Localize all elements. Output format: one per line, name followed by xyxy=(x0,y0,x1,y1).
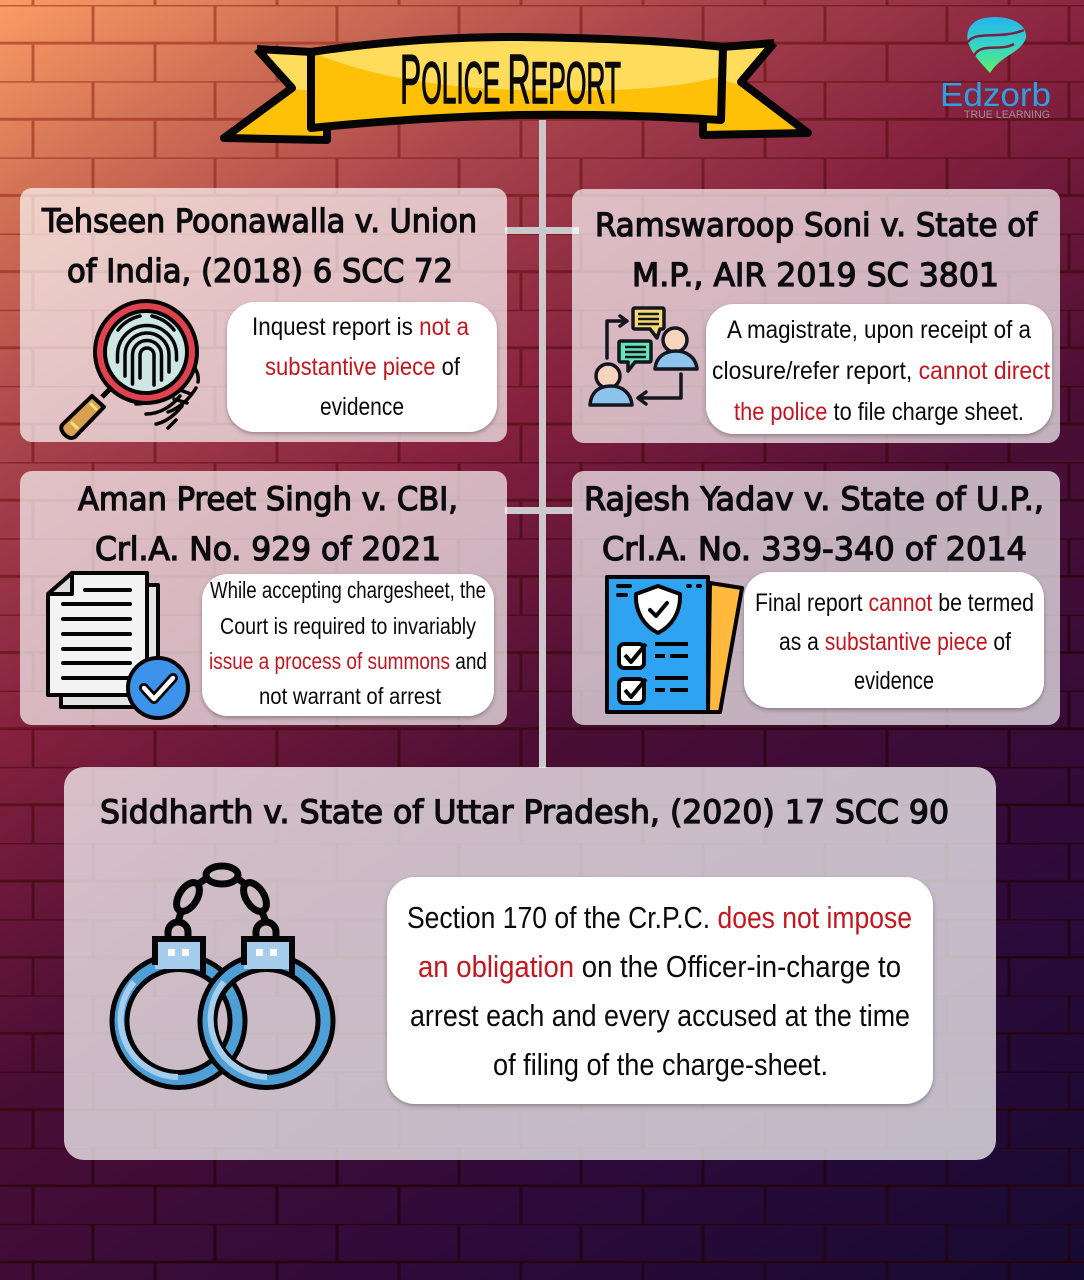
banner heading: POLICE REPORT xyxy=(400,40,621,118)
icon: two people exchanging messages xyxy=(590,308,697,405)
callout: evidence xyxy=(320,393,404,421)
callout: Court is required to invariably xyxy=(220,613,476,639)
callout: substantive piece of xyxy=(265,353,460,381)
callout: arrest each and every accused at the time xyxy=(410,998,910,1033)
heading: Aman Preet Singh v. CBI, xyxy=(78,480,458,518)
callout: evidence xyxy=(854,667,934,695)
heading: Ramswaroop Soni v. State of xyxy=(595,206,1038,244)
callout xyxy=(387,877,933,1104)
callout: as a substantive piece of xyxy=(779,628,1011,656)
callout: While accepting chargesheet, the xyxy=(210,577,486,603)
title banner xyxy=(224,37,808,140)
callout: issue a process of summons and xyxy=(209,648,487,674)
connector lines xyxy=(505,120,579,768)
icon: checklist with shield xyxy=(607,577,742,712)
callout: the police to file charge sheet. xyxy=(734,398,1024,426)
Edzorb logo: TRUE LEARNING xyxy=(964,109,1050,121)
panel: Ramswaroop Soni xyxy=(572,189,1060,443)
panel: Aman Preet Singh xyxy=(20,471,507,725)
heading xyxy=(584,480,1044,568)
callout xyxy=(202,574,494,716)
panel: Siddharth xyxy=(64,767,996,1160)
heading: Siddharth v. State of Uttar Pradesh, (2020) 17 SCC 90 xyxy=(100,793,949,831)
callout xyxy=(227,302,497,432)
callout xyxy=(706,304,1052,434)
callout: not warrant of arrest xyxy=(259,683,442,709)
heading xyxy=(41,202,477,290)
callout: closure/refer report, cannot direct xyxy=(712,357,1050,385)
callout xyxy=(744,572,1044,708)
heading xyxy=(595,206,1038,294)
panel: Tehseen Poonawalla xyxy=(20,188,507,442)
callout: Final report cannot be termed xyxy=(755,589,1034,617)
heading: Crl.A. No. 929 of 2021 xyxy=(95,530,441,568)
icon: documents with check xyxy=(48,573,188,718)
heading: Crl.A. No. 339-340 of 2014 xyxy=(602,530,1027,568)
callout: Inquest report is not a xyxy=(252,313,469,341)
heading: Rajesh Yadav v. State of U.P., xyxy=(584,480,1044,518)
heading: M.P., AIR 2019 SC 3801 xyxy=(632,256,999,294)
Edzorb logo xyxy=(940,17,1051,121)
callout: an obligation on the Officer-in-charge to xyxy=(418,949,901,984)
heading: of India, (2018) 6 SCC 72 xyxy=(67,252,453,290)
callout: Section 170 of the Cr.P.C. does not impose xyxy=(407,900,912,935)
icon: handcuffs xyxy=(120,866,326,1080)
callout: of filing of the charge-sheet. xyxy=(493,1047,828,1082)
icon: fingerprint magnifier xyxy=(61,301,198,438)
callout: A magistrate, upon receipt of a xyxy=(727,316,1031,344)
panel: Rajesh Yadav xyxy=(572,471,1060,725)
heading: Tehseen Poonawalla v. Union xyxy=(41,202,477,240)
Edzorb logo: Edzorb xyxy=(940,76,1051,113)
heading xyxy=(78,480,458,568)
